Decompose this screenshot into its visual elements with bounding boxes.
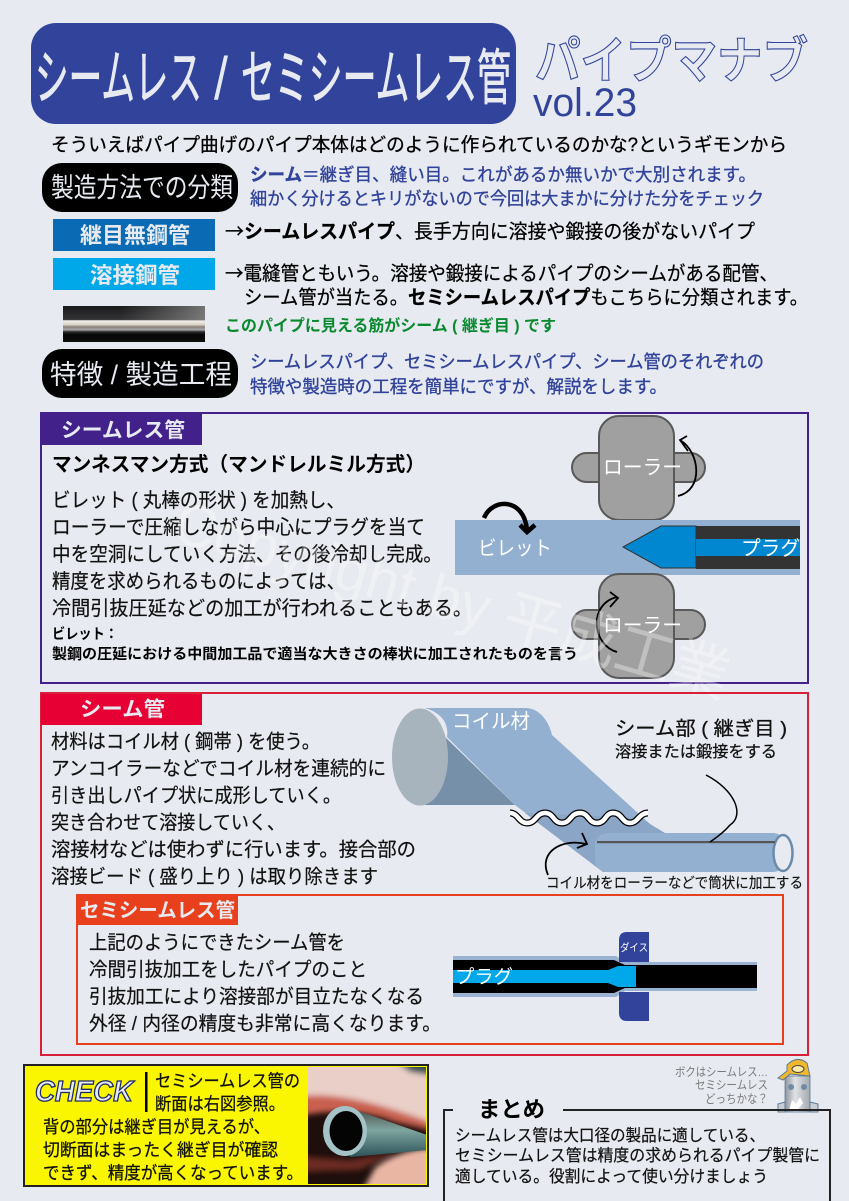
sub-panel: semi-seamless pipe <box>77 895 783 1044</box>
method description: 冷間引抜圧延などの加工が行われることもある。 <box>52 597 472 620</box>
welded description: シーム管が当たる。セミシームレスパイプもこちらに分類されます。 <box>244 287 808 309</box>
intro sentence: そういえばパイプ曲げのパイプ本体はどのように作られているのかな?というギモンから <box>51 134 787 156</box>
diagram: billet and plug <box>455 520 800 575</box>
heading: classification by manufacturing method <box>42 163 238 212</box>
photo: pipe with visible seam <box>63 306 205 342</box>
heading: classification by manufacturing method: 製造方法での分類 <box>51 173 233 203</box>
seam pipe description: 溶接材などは使わずに行います。接合部の <box>51 839 416 861</box>
callout: seam part: 溶接または鍛接をする <box>615 743 777 761</box>
seam definition text: 細かく分けるとキリがないので今回は大まかに分けた分をチェック <box>250 189 764 209</box>
summary text: シームレス管は大口径の製品に適している、 <box>455 1126 765 1145</box>
welded description <box>225 257 808 309</box>
mascot speech text: ボクはシームレス… <box>675 1065 768 1079</box>
seam definition text: シーム＝継ぎ目、縫い目。これがあるか無いかで大別されます。 <box>250 165 756 185</box>
label: seamless steel pipe <box>53 219 215 251</box>
series logo: パイプマナブ vol.23: vol.23 <box>533 81 637 125</box>
callout: forming with rollers <box>546 833 803 892</box>
diagram: coil strip forming into pipe <box>392 708 792 872</box>
series logo: パイプマナブ vol.23 <box>533 33 808 125</box>
features intro text: 特徴や製造時の工程を簡単にですが、解説をします。 <box>250 377 667 397</box>
heading: features and process: 特徴 / 製造工程 <box>50 360 232 390</box>
diagram: top roller: ローラー <box>603 457 682 479</box>
title banner: / <box>214 45 228 112</box>
diagram: drawing through die <box>453 932 757 1021</box>
semi-seamless description: 引抜加工により溶接部が目立たなくなる <box>89 986 424 1008</box>
summary heading: まとめ <box>478 1097 545 1122</box>
seam pipe description: 引き出しパイプ状に成形していく。 <box>51 785 341 807</box>
panel: check <box>24 1060 435 1195</box>
callout: forming with rollers: コイル材をローラーなどで筒状に加工する <box>546 875 803 892</box>
semi-seamless description <box>89 932 441 1035</box>
seam pipe description: 材料はコイル材 ( 鋼帯 ) を使う。 <box>51 731 320 753</box>
arrow: billet rotation <box>484 504 535 532</box>
panel: summary <box>444 1097 830 1201</box>
callout: seam part: シーム部 ( 継ぎ目 ) <box>615 718 787 740</box>
summary text: 適している。役割によって使い分けましょう <box>455 1167 768 1186</box>
method description: ローラーで圧縮しながら中心にプラグを当て <box>52 516 425 539</box>
icon: pipe mascot with cap <box>778 1059 818 1112</box>
diagram: top roller <box>572 416 705 520</box>
features intro text: シームレスパイプ、セミシームレスパイプ、シーム管のそれぞれの <box>250 352 764 372</box>
semi-seamless description: 外径 / 内径の精度も非常に高くなります。 <box>89 1013 441 1035</box>
label: welded steel pipe <box>53 258 215 290</box>
diagram: billet and plug: プラグ <box>741 537 800 560</box>
diagram: billet and plug: ビレット <box>478 537 552 560</box>
method description: ビレット ( 丸棒の形状 ) を加熱し、 <box>52 489 345 512</box>
title banner <box>31 23 516 124</box>
welded description: →電縫管ともいう。溶接や鍛接によるパイプのシームがある配管、 <box>225 257 778 286</box>
diagram: bottom roller <box>572 574 705 678</box>
title banner: シームレス <box>35 45 202 112</box>
diagram: drawing through die: ダイス <box>620 941 648 954</box>
photo: pipe cross-section <box>308 1067 426 1184</box>
check text: セミシームレス管の <box>155 1071 300 1091</box>
mascot speech text <box>675 1065 768 1106</box>
seamless description: →シームレスパイプ、長手方向に溶接や鍛接の後がないパイプ <box>225 215 755 244</box>
sub-panel tab: セミシームレス管 <box>80 899 235 922</box>
panel: seam pipe <box>41 693 808 1055</box>
title banner: セミシームレス管 <box>241 45 511 112</box>
seam pipe description: アンコイラーなどでコイル材を連続的に <box>51 758 386 780</box>
panel tab: seamless pipe <box>41 414 202 445</box>
label: seamless steel pipe: 継目無鋼管 <box>80 223 190 248</box>
callout: seam part <box>615 718 787 842</box>
billet footnote: 製鋼の圧延における中間加工品で適当な大きさの棒状に加工されたものを言う <box>52 645 578 663</box>
watermark: Copyright by 平成工業 <box>166 488 738 711</box>
features intro text <box>250 352 764 397</box>
green caption: このパイプに見える筋がシーム ( 継ぎ目 ) です <box>225 316 556 335</box>
seam pipe description: 溶接ビード ( 盛り上り ) は取り除きます <box>51 866 378 888</box>
seam pipe description <box>51 731 416 888</box>
check divider bar <box>145 1072 148 1112</box>
check text <box>43 1071 303 1183</box>
panel tab: seamless pipe: シームレス管 <box>61 419 185 442</box>
diagram: drawing through die: プラグ <box>455 966 513 988</box>
panel: seamless pipe <box>41 413 808 683</box>
heading: features and process <box>42 349 238 398</box>
panel tab: seam pipe <box>41 694 202 725</box>
seam definition text <box>250 165 764 209</box>
check text: 切断面はまったく継ぎ目が確認 <box>43 1140 278 1160</box>
series logo: パイプマナブ vol.23: パイプマナブ <box>535 33 808 89</box>
billet footnote <box>52 625 578 663</box>
mascot speech text: セミシームレス <box>695 1078 768 1092</box>
method description: 中を空洞にしていく方法、その後冷却し完成。 <box>52 543 442 566</box>
check text: 背の部分は継ぎ目が見えるが、 <box>43 1117 270 1137</box>
check text: できず、精度が高くなっています。 <box>43 1163 303 1183</box>
diagram: bottom roller: ローラー <box>603 615 682 637</box>
billet footnote: ビレット： <box>52 625 118 643</box>
semi-seamless description: 上記のようにできたシーム管を <box>89 932 345 954</box>
summary text: セミシームレス管は精度の求められるパイプ製管に <box>455 1146 820 1165</box>
method heading: マンネスマン方式（マンドレルミル方式） <box>52 453 425 476</box>
method description: 精度を求められるものによっては、 <box>52 570 345 593</box>
seam pipe description: 突き合わせて溶接していく、 <box>51 812 285 834</box>
check text: 断面は右図参照。 <box>155 1094 285 1114</box>
diagram: coil strip forming into pipe: コイル材 <box>452 710 530 733</box>
summary text <box>455 1126 820 1186</box>
panel tab: seam pipe: シーム管 <box>80 698 165 721</box>
label: welded steel pipe: 溶接鋼管 <box>90 263 180 288</box>
mascot speech text: どっちかな？ <box>705 1092 768 1106</box>
method description <box>52 489 472 620</box>
semi-seamless description: 冷間引抜加工をしたパイプのこと <box>89 959 367 981</box>
check logo: CHECK <box>35 1076 135 1108</box>
